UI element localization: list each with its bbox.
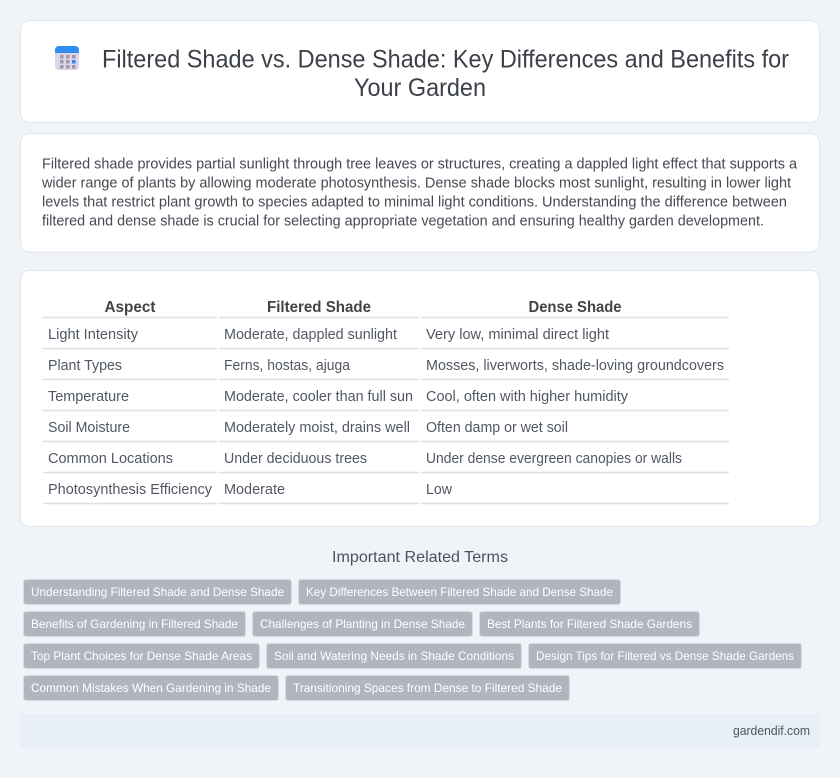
table row: temperature: Temperature: [48, 389, 129, 405]
tag: Key Differences Between Filtered Shade and Dense Shade: [306, 585, 613, 599]
table row: soil moisture: Often damp or wet soil: [426, 420, 568, 436]
table row: common locations: Under deciduous trees: [224, 451, 367, 467]
table row: light intensity: Very low, minimal direct light: [426, 327, 609, 343]
table row: common locations: [48, 451, 682, 467]
tag: Benefits of Gardening in Filtered Shade: [31, 617, 238, 631]
tag: Transitioning Spaces from Dense to Filtered Shade: [293, 681, 562, 695]
tag: Best Plants for Filtered Shade Gardens: [487, 617, 692, 631]
table row: photosynthesis efficiency: Photosynthesis Efficiency: [48, 482, 213, 498]
icon: calendar: [55, 46, 79, 70]
table row: soil moisture: [48, 420, 568, 436]
text block: introduction paragraph: [41, 156, 798, 230]
tag: [480, 612, 700, 636]
tag: Top Plant Choices for Dense Shade Areas: [31, 649, 252, 663]
table row: plant types: Plant Types: [48, 358, 122, 374]
tag: Design Tips for Filtered vs Dense Shade Gardens: [536, 649, 794, 663]
table row: light intensity: Moderate, dappled sunlight: [224, 327, 397, 343]
table row: photosynthesis efficiency: Moderate: [224, 482, 285, 498]
table row: light intensity: Light Intensity: [48, 327, 139, 343]
tag: [266, 644, 522, 668]
table header: Aspect: [104, 299, 156, 316]
table row: common locations: Under dense evergreen canopies or walls: [426, 451, 682, 467]
tag: Challenges of Planting in Dense Shade: [260, 617, 465, 631]
table row: plant types: [48, 358, 724, 374]
heading: important related terms: Important Related Terms: [332, 549, 508, 566]
footer: site name: gardendif.com: [733, 724, 810, 738]
tag: [528, 644, 802, 668]
table row: soil moisture: Moderately moist, drains well: [224, 420, 410, 436]
tag: [24, 644, 260, 668]
text block: introduction paragraph: filtered and dense shade is crucial for selecting appropriate vegetation and ensuring healthy garden development.: [42, 214, 764, 230]
table row: photosynthesis efficiency: Low: [426, 482, 453, 498]
tag: [24, 676, 278, 700]
table row: common locations: Common Locations: [48, 451, 173, 467]
panel: header: [20, 20, 820, 122]
title: Filtered Shade vs. Dense Shade: Key Differences and Benefits for: [102, 46, 789, 74]
text block: introduction paragraph: wider range of plants by allowing moderate photosynthesis. Dense shade blocks most sunlight, resulting in lower light: [41, 176, 791, 192]
table row: temperature: Moderate, cooler than full sun: [224, 389, 413, 405]
title: [102, 46, 789, 102]
tag: [286, 676, 570, 700]
table row: light intensity: [48, 327, 609, 343]
panel: comparison table: [20, 270, 820, 526]
tag: Understanding Filtered Shade and Dense Shade: [31, 585, 284, 599]
tag: [24, 580, 292, 604]
related term tags: [24, 580, 802, 700]
tag: Soil and Watering Needs in Shade Conditions: [274, 649, 514, 663]
table header: Dense Shade: [528, 299, 622, 316]
table row: plant types: Ferns, hostas, ajuga: [224, 358, 351, 374]
table row: temperature: Cool, often with higher humidity: [426, 389, 629, 405]
title: Your Garden: [354, 74, 486, 102]
tag: [252, 612, 472, 636]
text block: introduction paragraph: levels that restrict plant growth to species adapted to minimal light conditions. Understanding the difference between: [42, 194, 787, 210]
table row: plant types: Mosses, liverworts, shade-loving groundcovers: [426, 358, 724, 374]
tag: [298, 580, 620, 604]
table row: soil moisture: Soil Moisture: [48, 420, 130, 436]
table header: [104, 299, 622, 316]
tag: [24, 612, 246, 636]
panel: introduction: [20, 134, 820, 252]
table header: Filtered Shade: [267, 299, 371, 316]
text block: introduction paragraph: Filtered shade provides partial sunlight through tree leaves or structures, creating a dappled light effect that supports a: [42, 156, 798, 172]
table row: temperature: [48, 389, 629, 405]
footer: [20, 714, 820, 748]
tag: Common Mistakes When Gardening in Shade: [31, 681, 271, 695]
table row: photosynthesis efficiency: [48, 482, 453, 498]
